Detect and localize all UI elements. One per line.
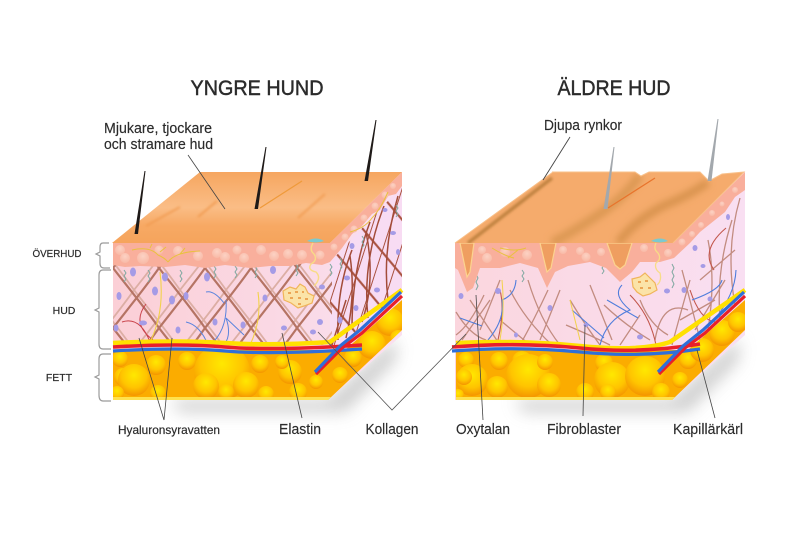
callout: hyaluronsyravatten: Hyaluronsyravatten — [118, 423, 220, 437]
title: äldre hud: ÄLDRE HUD — [558, 77, 670, 100]
callout: kapillärkärl — [673, 350, 743, 438]
wrinkled skin surface — [455, 172, 744, 285]
callout: djupa rynkor: Djupa rynkor — [544, 118, 622, 134]
callout: kollagen — [318, 332, 466, 438]
fat layer — [452, 300, 748, 401]
callout: mjukare hud — [104, 121, 225, 209]
title: yngre hud: YNGRE HUND — [190, 77, 324, 100]
callout: oxytalan: Oxytalan — [456, 421, 510, 438]
block shadow — [170, 338, 396, 412]
hairs — [134, 120, 376, 234]
callout: kapillärkärl: Kapillärkärl — [673, 421, 743, 438]
callout: mjukare hud: Mjukare, tjockare — [104, 121, 212, 137]
epidermis with wrinkle folds — [455, 172, 745, 292]
fat layer — [110, 300, 406, 402]
skin surface — [112, 172, 402, 286]
bracket: fett — [95, 354, 111, 401]
epidermis layer — [113, 172, 402, 268]
callout: elastin: Elastin — [279, 421, 321, 438]
block shadow — [514, 338, 739, 412]
fat cell cluster — [283, 284, 314, 308]
panel: young skin block — [110, 120, 406, 412]
label: överhud: ÖVERHUD — [32, 248, 82, 260]
fat cell cluster — [632, 273, 657, 296]
callout: fibroblaster — [547, 325, 621, 438]
dermis layer — [455, 172, 745, 400]
callout: fibroblaster: Fibroblaster — [547, 421, 621, 438]
bracket: överhud — [96, 243, 110, 268]
panel: older skin block — [452, 119, 748, 412]
callout: elastin — [279, 333, 321, 438]
label: hud: HUD — [53, 305, 76, 317]
dermis layer — [113, 172, 402, 400]
callout: kollagen: Kollagen — [366, 421, 418, 438]
callout: hyaluronsyravatten — [118, 338, 220, 437]
blood vessels — [452, 290, 745, 374]
blood vessels — [113, 290, 402, 374]
callout: djupa rynkor — [543, 118, 622, 180]
hairs — [604, 119, 718, 209]
bracket: hud — [95, 270, 111, 349]
label: fett: FETT — [46, 372, 73, 384]
callout: mjukare hud: och stramare hud — [104, 137, 213, 153]
callout: oxytalan — [456, 295, 510, 438]
